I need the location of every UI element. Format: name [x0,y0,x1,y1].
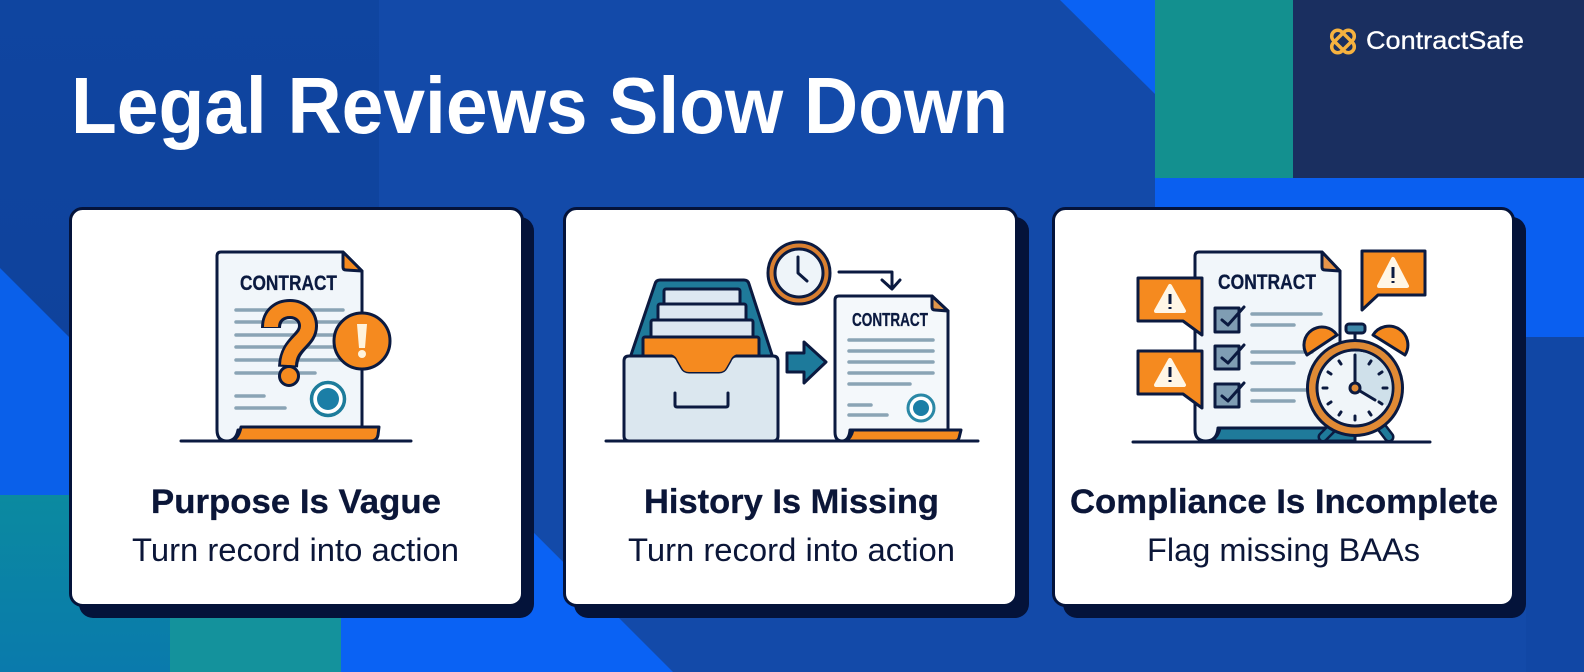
icon: vague contract document [181,252,411,441]
icon: contract document [606,296,978,441]
icon: warning callout top left [1138,278,1202,335]
panel: purpose is vague [70,208,534,618]
icon: vague contract document: CONTRACT [240,272,337,295]
icon: alert circle [334,313,390,369]
subheading: Turn record into action [132,532,459,568]
ground line [1133,440,1430,444]
panel: compliance is incomplete [1054,208,1526,618]
icon: wall clock [768,242,830,304]
icon: contract document: CONTRACT [852,310,928,330]
card body [70,208,522,606]
icon: file drawer [624,280,778,441]
icon: alarm clock [1304,324,1408,437]
icon: logo knot [1329,28,1357,55]
icon: compliance checklist document: CONTRACT [1218,271,1316,294]
card shadow [79,217,534,618]
arrow: drawer to contract [787,342,826,383]
logo wordmark: ContractSafe [1366,27,1524,55]
panel: history is missing [564,208,1029,618]
subheading: Turn record into action [628,532,955,568]
card shadow [1063,217,1526,618]
heading: Compliance Is Incomplete [1070,483,1498,521]
icon: warning callout bottom left [1138,351,1202,408]
icon: question mark [271,309,308,386]
card body [564,208,1016,606]
heading: History Is Missing [644,483,939,521]
heading: Purpose Is Vague [151,483,441,521]
subheading: Flag missing BAAs [1147,532,1420,568]
arrow: clock to contract [839,272,900,289]
icon: warning callout top right [1362,251,1425,310]
title: Legal Reviews Slow Down [71,61,1008,150]
card body [1054,208,1514,606]
card shadow [574,217,1029,618]
logo: ContractSafe [1329,27,1524,55]
icon: compliance checklist document [1195,252,1355,441]
